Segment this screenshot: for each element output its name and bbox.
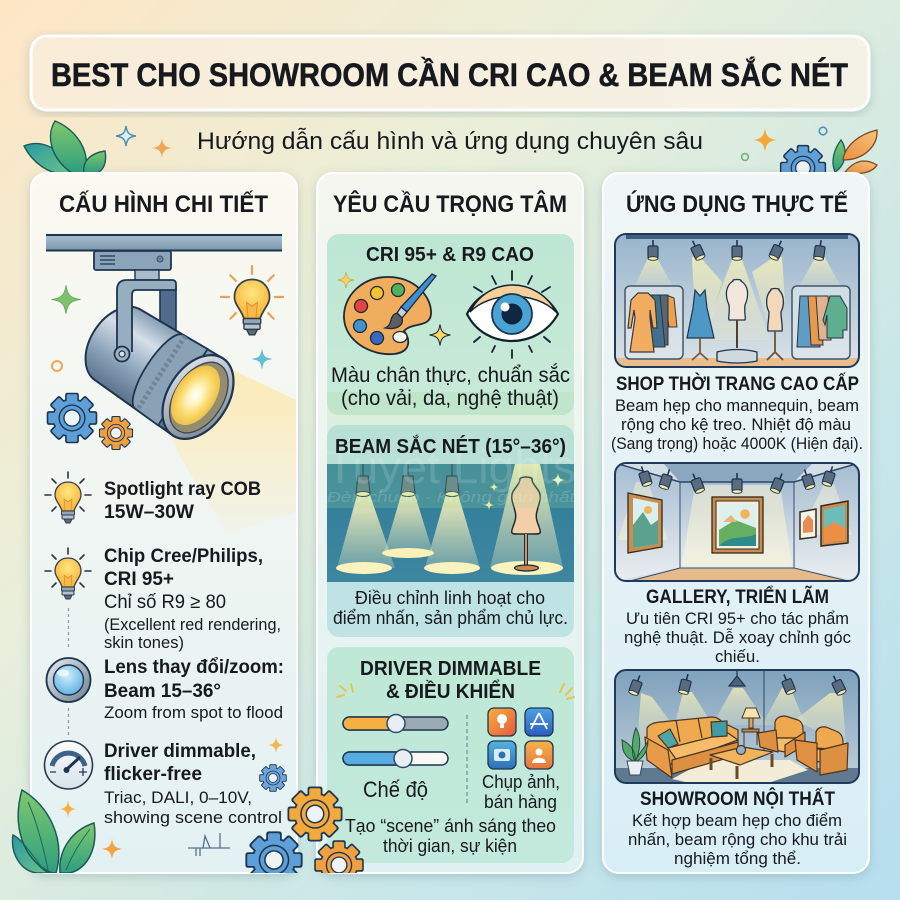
- icon: small sparkle: [268, 737, 284, 753]
- spec item: lens: Lens thay đổi/zoom:: [104, 657, 284, 678]
- spec item: lens: Beam 15–36°: [104, 681, 221, 702]
- card: driver: Chế độ: [363, 777, 428, 802]
- card heading: CRI: CRI 95+ & R9 CAO: [366, 244, 534, 266]
- icon: orange gear: [99, 416, 133, 450]
- scene: beams on mannequin: [327, 464, 574, 582]
- artwork: left: [628, 493, 662, 553]
- heading: yêu cầu trọng tâm: YÊU CẦU TRỌNG TÂM: [333, 190, 567, 218]
- spec item: driver: showing scene control: [104, 808, 282, 827]
- sparkle: [60, 800, 76, 818]
- artwork: centre: [712, 497, 763, 553]
- card heading: driver: [360, 658, 541, 703]
- icon: palette and brush: [344, 274, 436, 354]
- card: driver: thời gian, sự kiện: [383, 836, 517, 856]
- artwork: small right: [800, 509, 816, 539]
- heading: ứng dụng thực tế: ỨNG DỤNG THỰC TẾ: [626, 190, 848, 218]
- spec item: chip: skin tones): [104, 634, 184, 652]
- text: fashion shop: Beam hẹp cho mannequin, beam: [615, 396, 859, 415]
- icon: bulb 1: [45, 472, 91, 523]
- panel: yêu cầu trọng tâm: [317, 173, 583, 873]
- icon: lens: [46, 658, 90, 702]
- title banner: [31, 36, 869, 110]
- top right decoration: gear, leaves and sparkles: [742, 127, 877, 191]
- spec item: chip: [45, 546, 281, 652]
- text: gallery: GALLERY, TRIỂN LÃM: [646, 586, 829, 608]
- circuit doodle: [188, 833, 230, 856]
- spec item: driver: Driver dimmable,: [104, 741, 256, 762]
- spec item: driver: flicker-free: [104, 764, 202, 785]
- spec item: spotlight: [45, 472, 261, 523]
- leaves bottom left: [13, 790, 95, 873]
- lamp: [742, 708, 760, 747]
- spec item: lens: [46, 657, 284, 722]
- text: gallery: [624, 586, 851, 666]
- text: furniture showroom: [628, 788, 847, 868]
- text: furniture showroom: nhấn, beam rộng cho khu trải: [628, 830, 847, 849]
- icon: small gear: [259, 764, 287, 792]
- watermark: Tuyet Lights: [326, 441, 576, 493]
- icon: bulb 2: [45, 548, 91, 599]
- top left decoration: leaves and sparkles: [24, 121, 172, 173]
- caption: CRI second line: (cho vải, da, nghệ thuật): [341, 387, 559, 410]
- spec item: chip: CRI 95+: [104, 569, 174, 590]
- card heading: driver: & ĐIỀU KHIỂN: [386, 680, 515, 703]
- card: driver: Chụp ảnh,: [482, 772, 560, 792]
- icon: sparkle: [338, 272, 354, 288]
- scene: fashion shop: [615, 234, 859, 367]
- armchair two: [795, 727, 848, 775]
- watermark: Đèn chuẩn - Không gian chất: [327, 489, 576, 506]
- dress mannequin: [687, 290, 714, 338]
- text: furniture showroom: SHOWROOM NỘI THẤT: [640, 788, 835, 810]
- text: fashion shop: (Sang trọng) hoặc 4000K (Hiện đại).: [611, 434, 863, 453]
- blue gear: [245, 831, 303, 873]
- icon: orange ring: [52, 361, 62, 371]
- sofa: [645, 717, 738, 778]
- spec item: driver: Triac, DALI, 0–10V,: [104, 788, 252, 807]
- spec item: chip: (Excellent red rendering,: [104, 616, 281, 634]
- text: furniture showroom: Kết hợp beam hẹp cho điểm: [632, 811, 842, 830]
- text: fashion shop: [611, 373, 863, 453]
- mannequin on platform: [726, 280, 748, 320]
- illustration: track spotlight: [46, 235, 282, 452]
- orange gear: [288, 786, 342, 842]
- peach mannequin: [767, 288, 783, 331]
- card: driver: [327, 647, 574, 863]
- icon: sparkle: [430, 324, 450, 346]
- text: fashion shop: SHOP THỜI TRANG CAO CẤP: [616, 373, 859, 395]
- sparkle: [102, 838, 122, 860]
- spec item: spotlight: 15W–30W: [104, 502, 194, 523]
- icon: idea bulb: [221, 266, 283, 335]
- panel: cấu hình chi tiết: [31, 173, 297, 873]
- spec item: driver: [44, 741, 282, 827]
- text: gallery: chiếu.: [715, 647, 760, 666]
- card heading: beam: BEAM SẮC NÉT (15°–36°): [335, 434, 566, 458]
- card: beam: Điều chỉnh linh hoạt cho: [355, 588, 545, 608]
- icon: blue sparkle: [252, 350, 272, 368]
- card: CRI: [327, 234, 574, 415]
- left rack: [625, 286, 683, 359]
- card: CRI: Màu chân thực, chuẩn sắc: [331, 364, 570, 387]
- card: beam: [327, 425, 574, 637]
- text: gallery: Ưu tiên CRI 95+ cho tác phẩm: [626, 609, 849, 628]
- rug: [672, 760, 808, 783]
- subtitle: Hướng dẫn cấu hình và ứng dụng chuyên sâu: [197, 128, 703, 155]
- icon: dimmer gauge: [44, 741, 92, 789]
- app icons: [488, 708, 553, 769]
- icon: green sparkle: [52, 285, 80, 314]
- text: fashion shop: rộng cho kệ treo. Nhiệt độ màu: [621, 415, 851, 434]
- card heading: driver: DRIVER DIMMABLE: [360, 658, 541, 680]
- watermark: [326, 392, 576, 508]
- card: driver: Tạo “scene” ánh sáng theo: [345, 816, 556, 836]
- light beam: [170, 370, 296, 533]
- scene: gallery: [615, 463, 859, 581]
- spec item: chip: Chip Cree/Philips,: [104, 546, 263, 567]
- artwork: big right: [821, 501, 848, 546]
- orange gear lower: [314, 840, 364, 873]
- spec item: lens: Zoom from spot to flood: [104, 704, 283, 722]
- accent rays: [337, 684, 574, 699]
- spec item: chip: Chỉ số R9 ≥ 80: [104, 592, 226, 613]
- text: furniture showroom: nghiệm tổng thể.: [674, 849, 801, 868]
- scene: furniture showroom: [615, 670, 859, 783]
- plant: [622, 728, 648, 775]
- coffee table: [710, 746, 773, 779]
- armchair one: [758, 716, 805, 757]
- card: driver: bán hàng: [484, 792, 557, 812]
- right rack: [792, 286, 850, 359]
- slider: colour temperature: [343, 750, 448, 768]
- foreground decoration: leaves, gears and sparkles: [12, 786, 364, 873]
- text: gallery: nghệ thuật. Dễ xoay chỉnh góc: [624, 628, 851, 647]
- icon: eye: [467, 271, 558, 358]
- heading: cấu hình chi tiết: CẤU HÌNH CHI TIẾT: [59, 190, 268, 218]
- slider: brightness: [343, 714, 448, 732]
- icon: blue gear: [47, 393, 97, 443]
- card: beam: điểm nhấn, sản phẩm chủ lực.: [333, 608, 568, 628]
- panel: ứng dụng thực tế: [603, 173, 869, 873]
- spec item: spotlight: Spotlight ray COB: [104, 479, 261, 500]
